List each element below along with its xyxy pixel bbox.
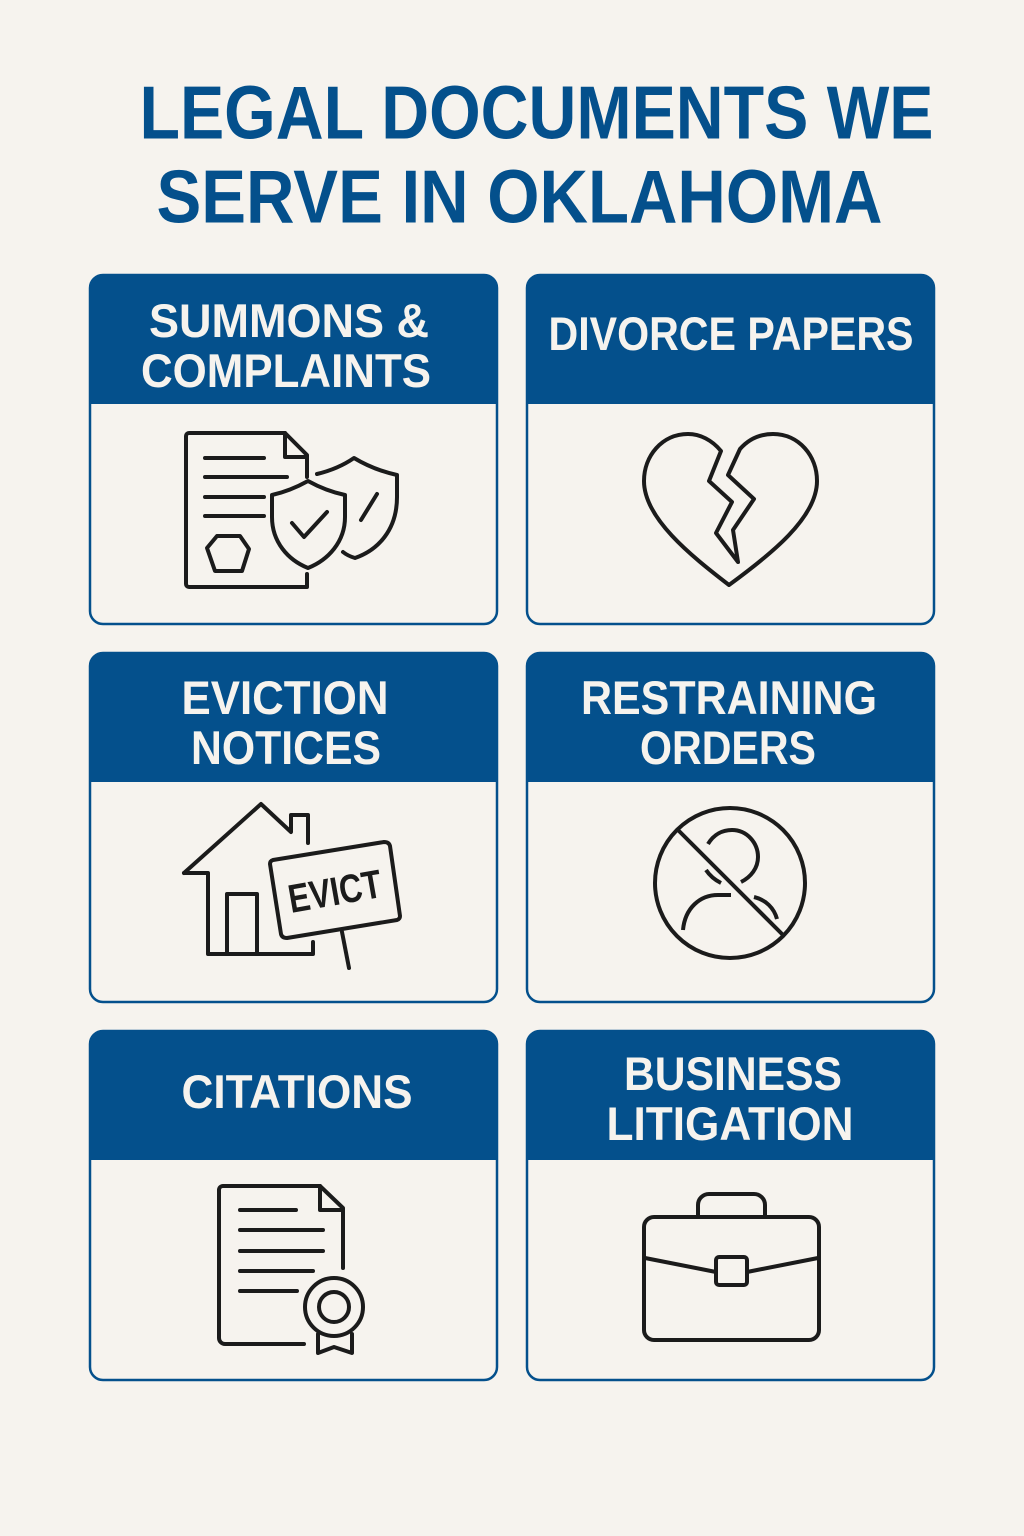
heading: citations: CITATIONS	[182, 1065, 412, 1118]
icon: house with evict sign	[184, 804, 400, 968]
heading: summons & complaints: COMPLAINTS	[141, 344, 431, 397]
heading: restraining orders	[581, 671, 877, 774]
heading: summons & complaints: SUMMONS &	[149, 294, 429, 347]
heading: eviction notices: NOTICES	[191, 721, 381, 774]
icon: briefcase	[644, 1194, 819, 1340]
icon: prohibited person	[655, 808, 805, 958]
icon: document with shields	[186, 433, 397, 587]
icon: document with seal	[219, 1186, 363, 1353]
title: SERVE IN OKLAHOMA	[156, 154, 882, 238]
title: LEGAL DOCUMENTS WE	[140, 70, 934, 154]
heading: business litigation: BUSINESS	[624, 1047, 842, 1100]
panel: divorce papers	[527, 275, 934, 624]
title	[140, 70, 934, 238]
icon: broken heart	[644, 434, 817, 585]
panel: business litigation	[527, 1031, 934, 1380]
panel: restraining orders	[527, 653, 934, 1002]
panel: eviction notices	[90, 653, 497, 1002]
heading: restraining orders: ORDERS	[640, 721, 816, 774]
heading: business litigation	[606, 1047, 854, 1150]
heading: business litigation: LITIGATION	[606, 1097, 854, 1150]
panel: citations	[90, 1031, 497, 1380]
heading: eviction notices	[182, 671, 388, 774]
heading: eviction notices: EVICTION	[182, 671, 388, 724]
icon: house with evict sign: EVICT	[285, 862, 385, 922]
panel: summons & complaints	[90, 275, 497, 624]
heading: summons & complaints	[141, 294, 431, 397]
heading: divorce papers: DIVORCE PAPERS	[548, 307, 914, 360]
heading: restraining orders: RESTRAINING	[581, 671, 877, 724]
